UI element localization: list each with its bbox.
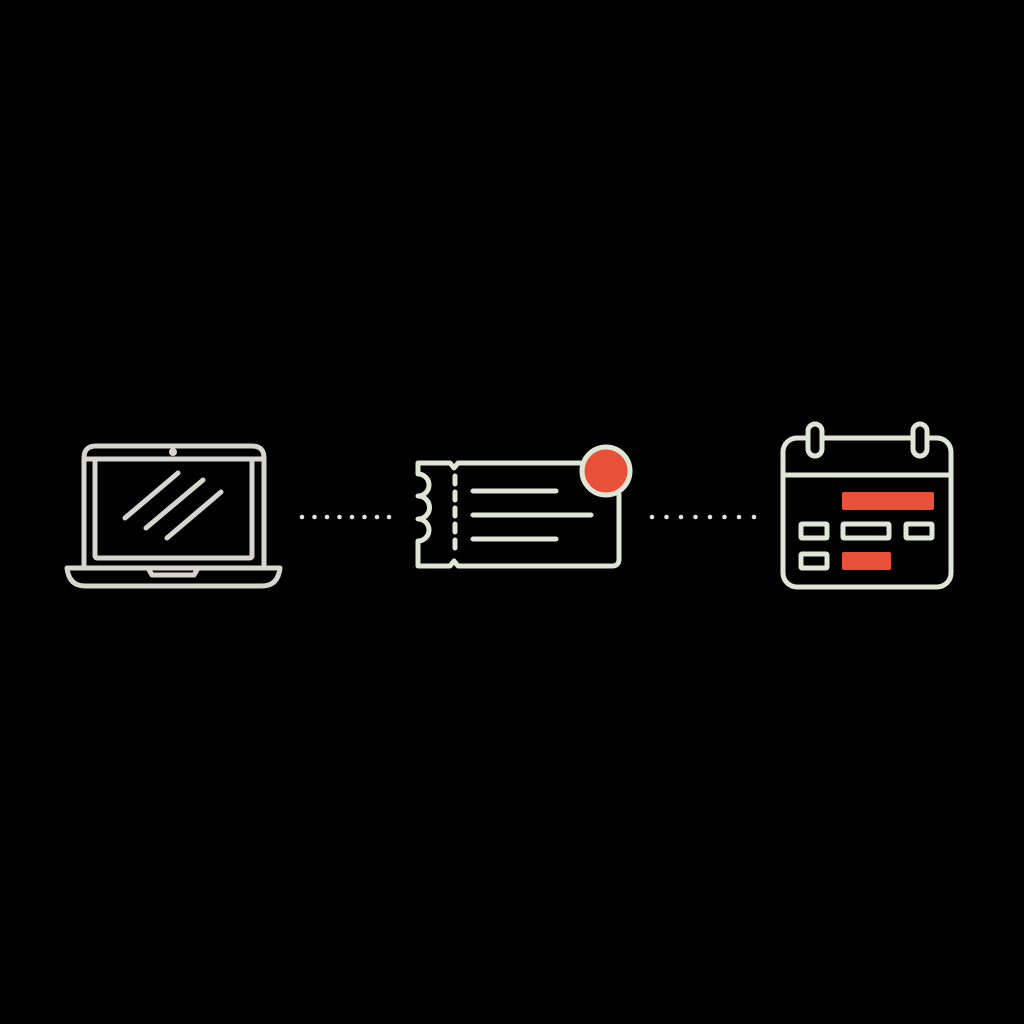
icon: laptop	[67, 446, 280, 586]
notification badge	[582, 447, 630, 495]
icon: calendar	[783, 424, 951, 587]
icon: ticket with notification	[418, 447, 630, 566]
arrow: dotted connector 1	[300, 515, 391, 519]
arrow: dotted connector 2	[650, 515, 756, 519]
